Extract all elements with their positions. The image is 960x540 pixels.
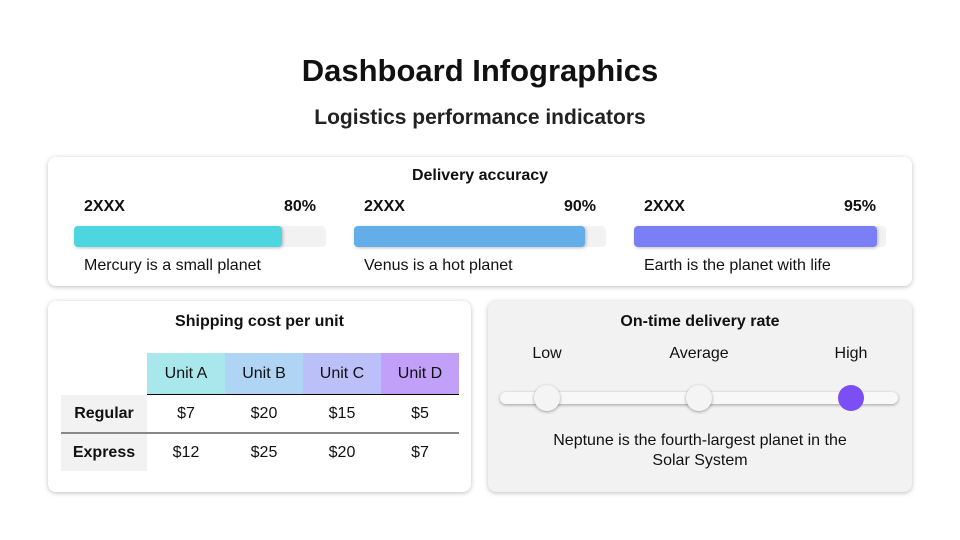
bar: earth: Earth is the planet with life	[644, 257, 831, 274]
table	[61, 353, 459, 471]
title: Dashboard Infographics	[302, 53, 658, 88]
description: Neptune is the fourth-largest planet in the Solar System	[553, 432, 847, 469]
heading: delivery accuracy: Delivery accuracy	[412, 167, 548, 184]
bar: venus: 2XXX	[364, 198, 405, 215]
bar: earth: 2XXX	[644, 198, 685, 215]
bar: venus	[353, 198, 606, 274]
heading: shipping cost: Shipping cost per unit	[175, 313, 344, 330]
bar: mercury: 80%	[284, 198, 316, 215]
bar: mercury	[73, 198, 326, 274]
bar: mercury: 2XXX	[84, 198, 125, 215]
panel: shipping cost	[48, 301, 471, 492]
panel: on-time delivery	[488, 301, 912, 492]
table: Unit D	[398, 364, 442, 382]
heading: on-time delivery: On-time delivery rate	[620, 313, 780, 330]
panel: delivery accuracy	[48, 157, 912, 286]
bar: mercury: Mercury is a small planet	[84, 257, 261, 274]
table: $12	[173, 444, 199, 460]
table: $20	[329, 444, 355, 460]
slider labels: Average	[669, 345, 729, 362]
table: $7	[177, 405, 195, 422]
bar: venus: Venus is a hot planet	[364, 257, 513, 274]
table: Express	[73, 444, 135, 460]
table: Regular	[74, 405, 134, 422]
slider labels	[532, 345, 867, 362]
table: $5	[411, 405, 429, 422]
slider labels: Low	[532, 345, 562, 362]
bar: venus: 90%	[564, 198, 596, 215]
table: Unit B	[242, 364, 286, 382]
subtitle: Logistics performance indicators	[314, 106, 646, 129]
table: $7	[411, 444, 429, 460]
slider	[498, 384, 900, 414]
bar: earth	[633, 198, 886, 274]
slider labels: High	[835, 345, 867, 362]
bar: earth: 95%	[844, 198, 876, 215]
table: $15	[329, 405, 355, 422]
table: Unit C	[320, 364, 364, 382]
table: $25	[251, 444, 277, 460]
table: Unit A	[165, 364, 207, 382]
table: $20	[251, 405, 277, 422]
